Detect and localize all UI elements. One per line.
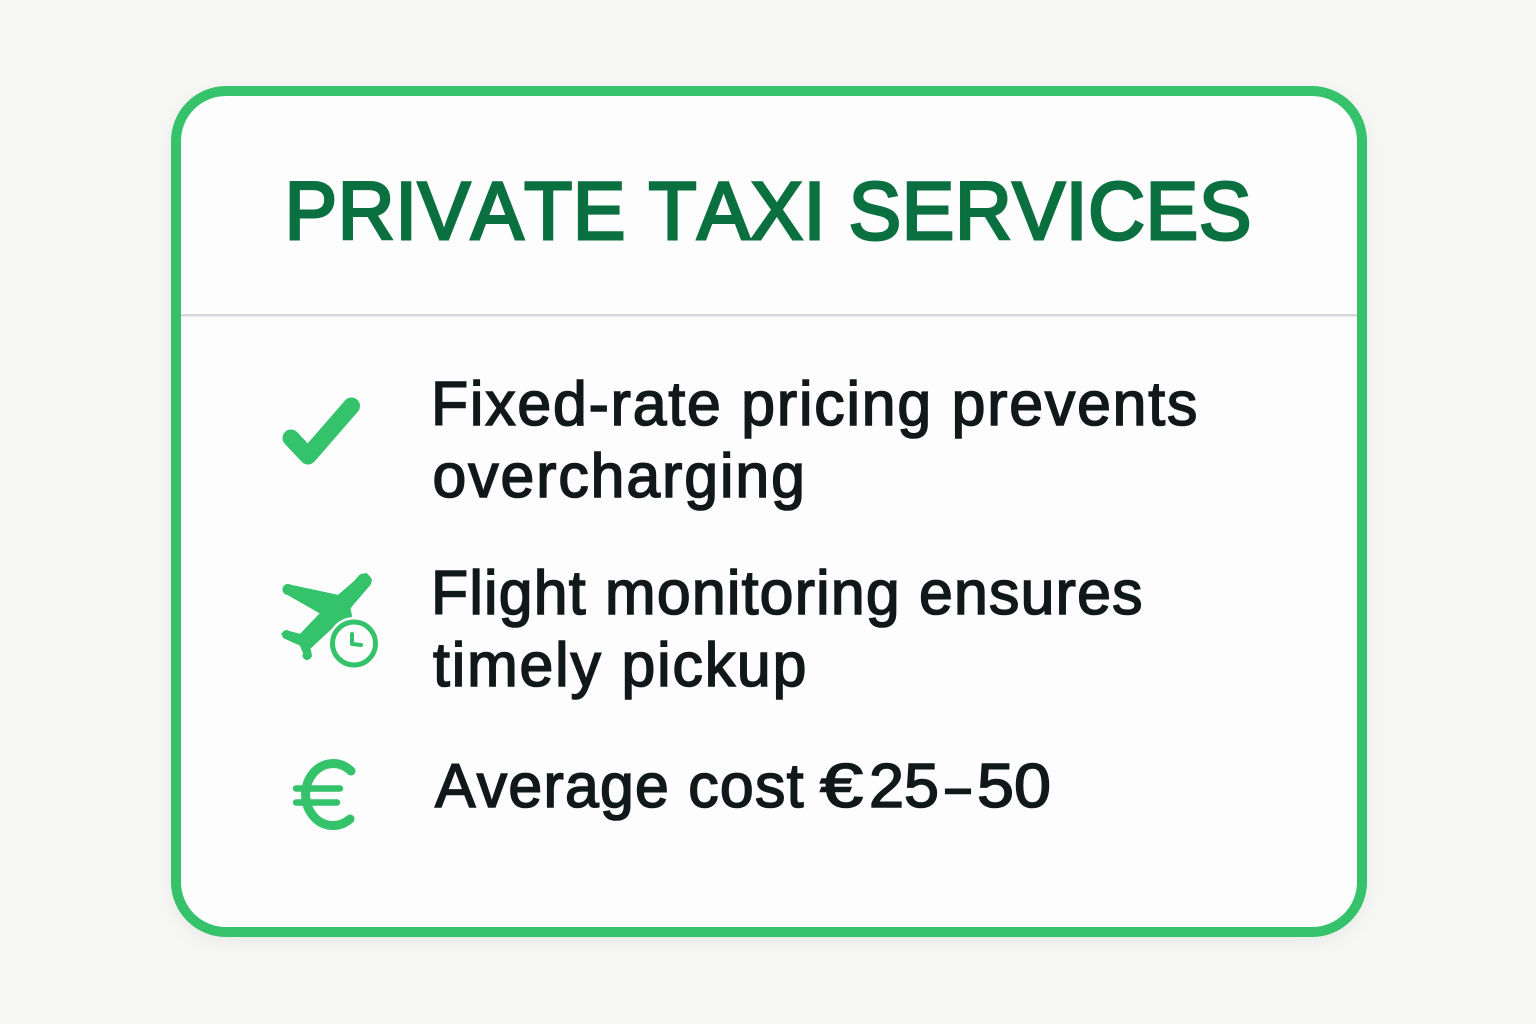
text: average cost: € [820,752,863,821]
heading: PRIVATE TAXI SERVICES [285,166,1251,258]
text: average cost: 50 [977,752,1051,821]
text: average cost: – [946,752,971,821]
text: flight monitoring [431,558,1142,700]
text: flight monitoring: timely pickup [433,630,806,700]
panel: private taxi services card [176,91,1362,932]
text: fixed-rate pricing: overcharging [432,441,805,511]
text: flight monitoring: Flight monitoring ensures [431,558,1142,628]
text: fixed-rate pricing [431,369,1197,511]
text: average cost [435,751,1051,821]
text: fixed-rate pricing: Fixed-rate pricing prevents [431,369,1197,439]
text: average cost: Average cost [435,751,803,821]
text: average cost: 25 [869,752,939,821]
icon: check mark [291,406,352,456]
icon: plane with clock [282,574,380,670]
icon: euro [296,764,351,826]
